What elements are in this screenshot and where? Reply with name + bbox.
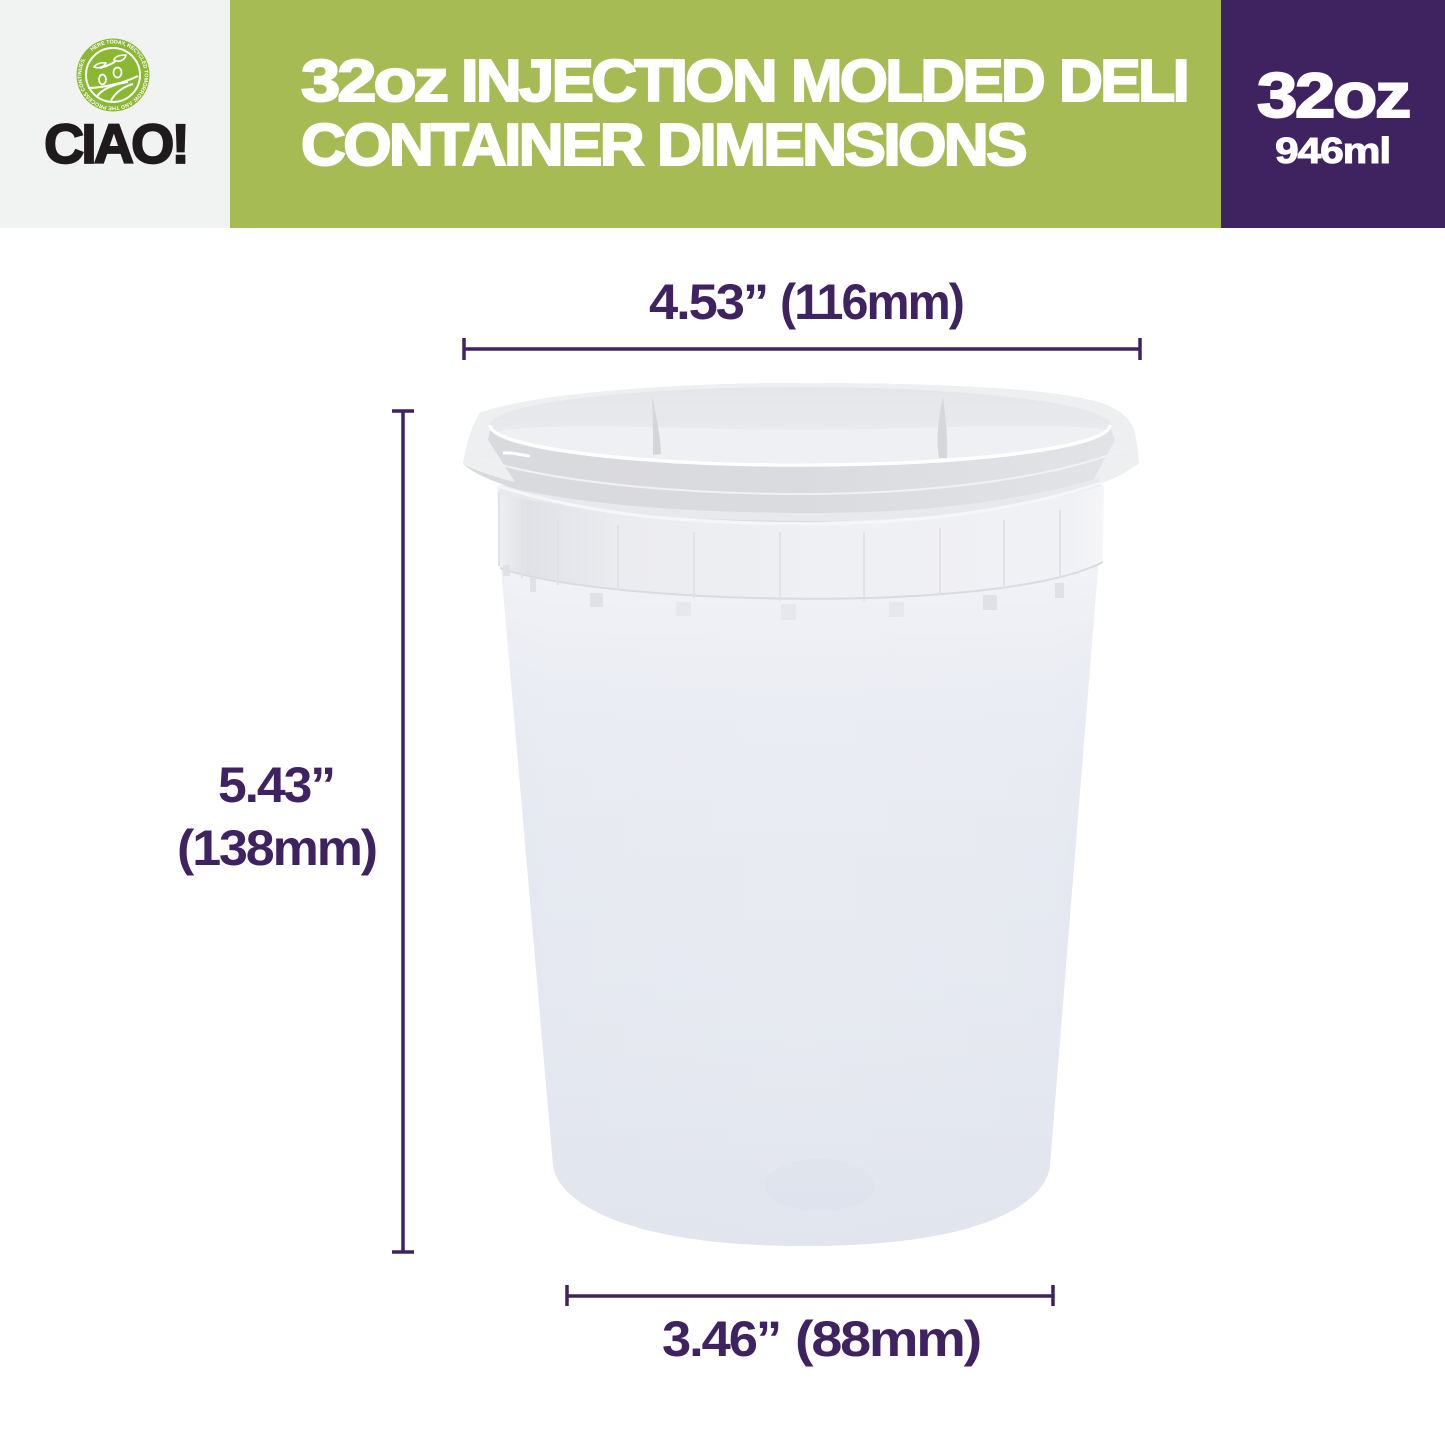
height dimension — [177, 411, 414, 1252]
icon: round green olive badge: HERE TODAY, RECYCLED TOMORROW. AND THE PROCESS CONTINUES. — [78, 40, 148, 110]
bottom width dimension: 3.46” — [662, 1311, 780, 1367]
title: DIMENSIONS — [657, 112, 1026, 178]
header: capacity panel: 946ml — [1275, 130, 1390, 171]
logo wordmark: CIAO! — [44, 112, 187, 175]
top width dimension: (116mm) — [780, 274, 963, 330]
bottom width dimension: (88mm) — [795, 1311, 980, 1367]
title: 32oz — [301, 48, 447, 114]
height dimension: 5.43” — [218, 757, 334, 813]
title — [301, 48, 1187, 178]
container collar band — [497, 485, 1104, 620]
deli container — [463, 383, 1139, 1246]
container lid — [463, 383, 1139, 524]
collar tabs — [503, 565, 1064, 620]
header: title band — [230, 0, 1221, 228]
title: MOLDED — [791, 48, 1044, 114]
height dimension: (138mm) — [177, 820, 376, 876]
title: INJECTION — [461, 48, 775, 114]
header: capacity panel: 32oz — [1257, 61, 1410, 131]
container body — [500, 555, 1099, 1246]
title: CONTAINER — [301, 112, 644, 178]
bottom width dimension — [567, 1285, 1053, 1367]
top width dimension: 4.53” — [649, 274, 767, 330]
top width dimension — [464, 274, 1140, 360]
header: capacity panel — [1221, 0, 1445, 228]
title: DELI — [1059, 48, 1187, 114]
header: logo panel — [0, 0, 230, 228]
